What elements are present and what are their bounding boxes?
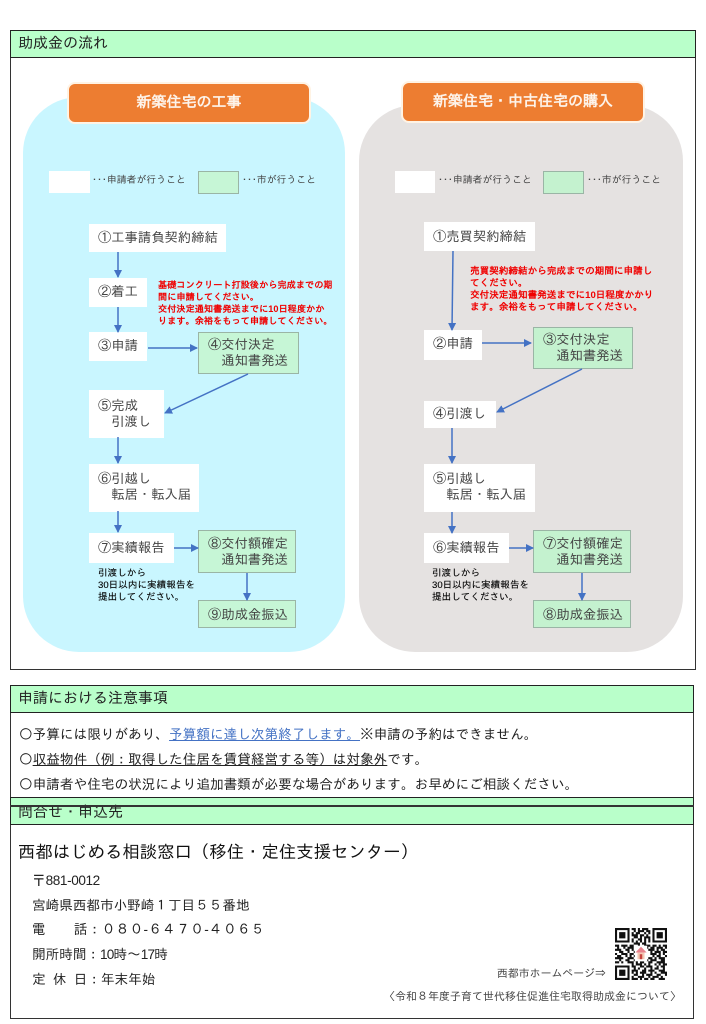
note line 2: 〇収益物件（例：取得した住居を賃貸経営する等）は対象外です。: [19, 752, 428, 767]
note line 3: 〇申請者や住宅の状況により追加書類が必要な場合があります。お早めにご相談ください。: [19, 777, 578, 792]
step 1 right: ①売買契約締結: [433, 229, 526, 244]
red note left: [158, 280, 333, 326]
step 7 right: 通知書発送: [556, 552, 623, 567]
step 2 right: [424, 330, 482, 360]
closed days: 定 休 日：年末年始: [32, 972, 155, 987]
note right: 30日以内に実績報告を: [432, 580, 529, 591]
heading: purchase: [401, 81, 645, 123]
legend text: city: ･･･市が行うこと: [242, 175, 316, 186]
red note right: 売買契約締結から完成までの期間に申請し: [470, 266, 652, 277]
heading: application notes: [10, 685, 694, 713]
step 5 right: 転居・転入届: [446, 487, 526, 502]
step 5 left: [89, 390, 164, 438]
note left: [98, 568, 195, 603]
step 5 left: 引渡し: [111, 414, 151, 429]
step 8 left: 通知書発送: [221, 552, 288, 567]
step 8 left: [198, 530, 296, 573]
red note right: ます。余裕をもって申請してください。: [470, 302, 643, 313]
postal code: 〒881-0012: [32, 873, 100, 888]
note line 1: 〇予算には限りがあり、予算額に達し次第終了します。※申請の予約はできません。: [19, 727, 537, 742]
red note left: 基礎コンクリート打設後から完成までの期: [158, 280, 333, 290]
step 2 right: ②申請: [433, 336, 473, 351]
legend: left: [49, 171, 316, 194]
red note left: 間に申請してください。: [158, 292, 259, 302]
red note right: [470, 266, 653, 313]
step 5 right: ⑤引越し: [433, 471, 486, 486]
step 6 left: ⑥引越し: [98, 471, 151, 486]
heading: subsidy flow: [10, 30, 696, 58]
panel: new construction background: [23, 97, 345, 652]
step 8 right: [533, 600, 631, 628]
legend: right: [395, 171, 661, 194]
step 7 right: [533, 530, 631, 573]
step 5 right: [424, 464, 535, 512]
legend text: city: ･･･市が行うこと: [587, 175, 661, 186]
step 7 left: ⑦実績報告: [98, 540, 164, 555]
step 3 left: ③申請: [98, 338, 138, 353]
step 9 left: [198, 600, 296, 628]
legend swatch: city: [543, 171, 584, 194]
step 6 right: ⑥実績報告: [433, 540, 499, 555]
heading: contact: 問合せ・申込先: [18, 804, 123, 821]
step 6 left: 転居・転入届: [111, 487, 191, 502]
step 4 left: 通知書発送: [221, 353, 288, 368]
phone: 電 話：０８０-６４７０-４０６５: [32, 922, 265, 937]
program name: 〈令和８年度子育て世代移住促進住宅取得助成金について〉: [384, 991, 681, 1003]
homepage label: 西都市ホームページ⇒: [497, 968, 606, 980]
note right: 引渡しから: [432, 568, 480, 579]
legend swatch: applicant: [49, 171, 90, 193]
red note right: 交付決定通知書発送までに10日程度かかり: [470, 290, 653, 301]
note right: [432, 568, 529, 603]
step 4 right: [424, 401, 496, 428]
legend text: applicant: ･･･申請者が行うこと: [92, 175, 186, 186]
contact header rule: [10, 805, 694, 806]
step 3 right: 通知書発送: [556, 348, 623, 363]
note left: 30日以内に実績報告を: [98, 580, 195, 591]
step 2 left: [89, 278, 147, 307]
step 6 right: [424, 533, 509, 563]
heading: application notes: 申請における注意事項: [18, 690, 168, 707]
heading: new construction: 新築住宅の工事: [136, 94, 242, 111]
red note left: ります。余裕をもって申請してください。: [158, 316, 333, 326]
legend swatch: city: [198, 171, 239, 194]
panel: contact: [10, 797, 694, 1019]
step 3 right: ③交付決定: [543, 332, 609, 347]
step 4 left: [198, 332, 299, 374]
step 1 left: [89, 224, 226, 252]
heading: subsidy flow: 助成金の流れ: [18, 35, 108, 52]
opening hours: 開所時間：10時～17時: [32, 947, 168, 962]
step 8 right: ⑧助成金振込: [543, 607, 623, 622]
step 1 right: [424, 222, 535, 251]
panel: subsidy flow: [10, 30, 696, 670]
red note right: てください。: [470, 278, 528, 289]
step 6 left: [89, 464, 199, 512]
legend swatch: applicant: [395, 171, 435, 193]
panel: purchase background: [359, 105, 683, 652]
step 8 left: ⑧交付額確定: [208, 536, 288, 551]
step 2 left: ②着工: [98, 284, 138, 299]
heading: contact: [10, 797, 694, 825]
icon: QR code: [615, 928, 667, 980]
red note left: 交付決定通知書発送までに10日程度かか: [158, 304, 324, 314]
step 9 left: ⑨助成金振込: [208, 607, 288, 622]
panel: application notes: [10, 685, 694, 798]
note left: 提出してください。: [98, 592, 184, 603]
step 4 right: ④引渡し: [433, 406, 486, 421]
step 3 right: [533, 327, 633, 369]
step 7 right: ⑦交付額確定: [543, 536, 623, 551]
legend text: applicant: ･･･申請者が行うこと: [438, 175, 532, 186]
step 7 left: [89, 533, 174, 563]
step 1 left: ①工事請負契約締結: [98, 230, 218, 245]
heading: new construction: [67, 82, 311, 124]
step 3 left: [89, 332, 147, 361]
note right: 提出してください。: [432, 592, 518, 603]
note left: 引渡しから: [98, 568, 146, 579]
step 4 left: ④交付決定: [208, 337, 274, 352]
heading: purchase: 新築住宅・中古住宅の購入: [433, 93, 613, 110]
address: 宮崎県西都市小野崎１丁目５５番地: [32, 898, 250, 913]
step 5 left: ⑤完成: [98, 398, 138, 413]
office name: 西都はじめる相談窓口（移住・定住支援センター）: [18, 842, 418, 862]
